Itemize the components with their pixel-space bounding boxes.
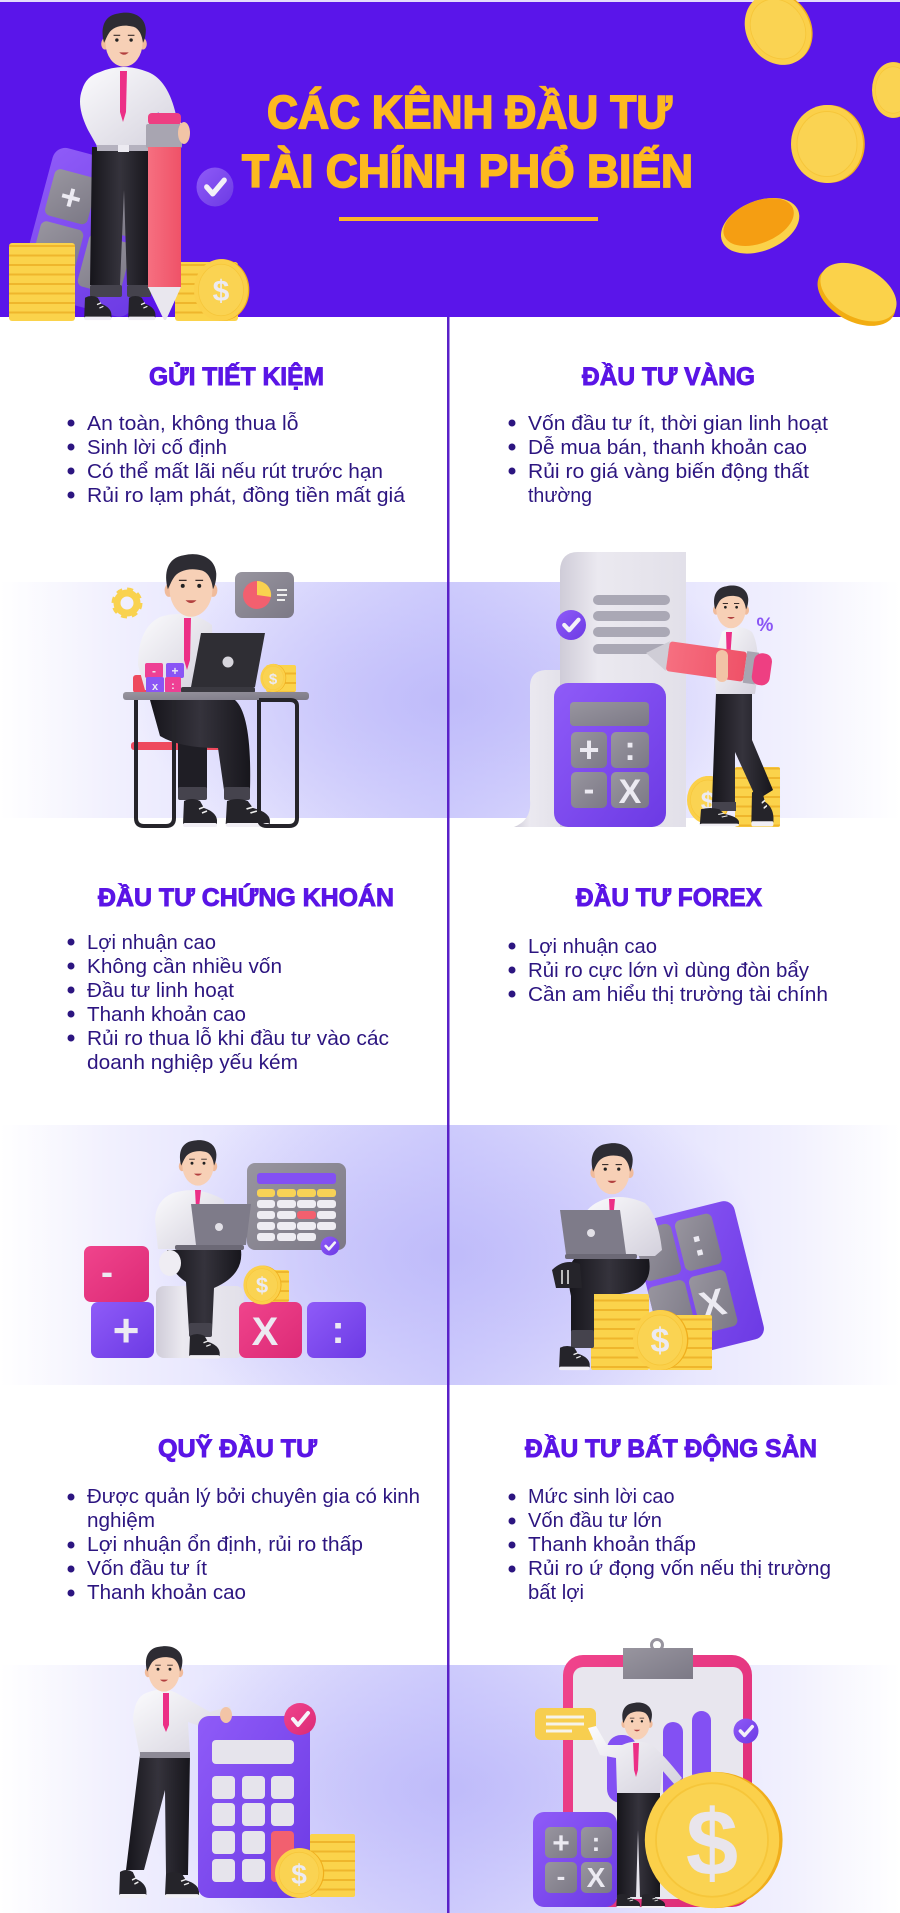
illustration: man with laptop on coins	[552, 1143, 766, 1370]
illustration: clipboard, chart, man and big coin: :	[592, 1827, 600, 1857]
bullet list: Rủi ro ứ đọng vốn nếu thị trường	[528, 1558, 831, 1580]
header banner	[0, 0, 900, 338]
illustration: man on math blocks with calendar: +	[113, 1304, 139, 1356]
heading: ĐẦU TƯ FOREX	[576, 883, 762, 912]
icon: left coin stack	[9, 243, 75, 321]
bullet list: Lợi nhuận cao	[87, 932, 216, 954]
illustration: man with laptop on coins: $	[651, 1322, 670, 1360]
bullet list: Thanh khoản thấp	[528, 1534, 696, 1556]
background band	[448, 1665, 900, 1913]
heading: QUỸ ĐẦU TƯ	[158, 1433, 317, 1463]
illustration: clipboard, chart, man and big coin	[533, 1640, 783, 1908]
heading: GỬI TIẾT KIỆM	[149, 361, 324, 391]
illustration: man at desk: x	[152, 681, 159, 693]
background band	[0, 1125, 448, 1385]
illustration: man at desk: +	[171, 664, 179, 678]
bullet list: Được quản lý bởi chuyên gia có kinh	[87, 1486, 420, 1508]
icon: floating gold coins	[713, 0, 900, 338]
title: TÀI CHÍNH PHỔ BIẾN	[242, 145, 693, 197]
bullet list: Sinh lời cố định	[87, 437, 227, 459]
bullet list: Cần am hiểu thị trường tài chính	[528, 984, 828, 1006]
illustration: receipt, calculator and man with pencil	[514, 552, 780, 827]
panel: đầu tư vàng	[448, 362, 900, 827]
panel: gửi tiết kiệm	[0, 361, 448, 827]
illustration: receipt, calculator and man with pencil: $	[701, 786, 716, 816]
bullet list	[508, 1486, 831, 1604]
bullet list: Vốn đầu tư lớn	[528, 1510, 662, 1532]
illustration: clipboard, chart, man and big coin: $	[686, 1790, 738, 1895]
background band	[448, 1125, 900, 1385]
bullet list: Thanh khoản cao	[87, 1582, 246, 1604]
illustration: man on math blocks with calendar	[84, 1140, 366, 1359]
illustration: man at desk	[113, 554, 309, 827]
character: man with pencil	[80, 13, 187, 320]
title	[242, 86, 693, 197]
illustration: man on math blocks with calendar: :	[331, 1308, 345, 1352]
icon: right coin stack and dollar coin	[175, 259, 249, 321]
illustration: receipt, calculator and man with pencil: +	[578, 729, 600, 770]
background band	[0, 582, 448, 818]
bullet list: Vốn đầu tư ít, thời gian linh hoạt	[528, 413, 828, 435]
illustration: man on math blocks with calendar: X	[252, 1310, 279, 1354]
bullet list: Lợi nhuận ổn định, rủi ro thấp	[87, 1534, 363, 1556]
bullet list: thường	[528, 485, 592, 507]
illustration: clipboard, chart, man and big coin: +	[552, 1827, 570, 1860]
panel: đầu tư chứng khoán	[0, 882, 448, 1385]
background band	[448, 582, 900, 818]
icon: percent sign: %	[757, 615, 774, 636]
bullet list: nghiệm	[87, 1510, 155, 1532]
bullet list: Rủi ro cực lớn vì dùng đòn bẩy	[528, 960, 809, 982]
bullet list: Rủi ro thua lỗ khi đầu tư vào các	[87, 1027, 389, 1050]
icon: tilted calculator: +	[56, 175, 86, 220]
bullet list: Không cần nhiều vốn	[87, 956, 282, 978]
bullet list	[68, 1486, 420, 1604]
icon: giant pencil	[146, 113, 190, 320]
illustration: clipboard, chart, man and big coin: X	[587, 1862, 606, 1893]
illustration: man on math blocks with calendar: -	[101, 1251, 113, 1292]
illustration: man at desk: $	[269, 671, 278, 688]
bullet list: Rủi ro giá vàng biến động thất	[528, 461, 809, 483]
title underline	[339, 217, 598, 221]
bullet list: Rủi ro lạm phát, đồng tiền mất giá	[87, 485, 406, 507]
icon: right coin stack and dollar coin: $	[213, 275, 230, 308]
illustration: man with laptop on coins: :	[686, 1222, 709, 1265]
bullet list	[68, 412, 406, 507]
bullet list: doanh nghiệp yếu kém	[87, 1052, 298, 1074]
bullet list: Lợi nhuận cao	[528, 936, 657, 958]
title: CÁC KÊNH ĐẦU TƯ	[267, 86, 673, 138]
heading: ĐẦU TƯ CHỨNG KHOÁN	[98, 882, 394, 912]
centre divider	[447, 317, 450, 1913]
illustration: receipt, calculator and man with pencil: :	[624, 730, 636, 768]
illustration: man on math blocks with calendar: $	[256, 1273, 268, 1298]
bullet list: An toàn, không thua lỗ	[87, 412, 298, 435]
illustration: man at desk: :	[171, 680, 175, 692]
panel: quỹ đầu tư	[0, 1433, 448, 1913]
illustration: receipt, calculator and man with pencil: X	[619, 773, 642, 811]
illustration: man with big calculator: $	[291, 1859, 307, 1890]
panel: đầu tư bất động sản	[448, 1433, 900, 1913]
illustration: clipboard, chart, man and big coin: -	[557, 1861, 565, 1891]
illustration: receipt, calculator and man with pencil: -	[584, 771, 594, 807]
heading: ĐẦU TƯ VÀNG	[582, 362, 755, 391]
illustration: man with laptop on coins: X	[696, 1281, 731, 1328]
bullet list: Vốn đầu tư ít	[87, 1558, 207, 1580]
illustration: man at desk: -	[152, 664, 156, 678]
panel: đầu tư forex	[448, 883, 900, 1385]
illustration: man with big calculator	[119, 1646, 355, 1898]
bullet list: bất lợi	[528, 1582, 584, 1604]
heading: ĐẦU TƯ BẤT ĐỘNG SẢN	[525, 1433, 817, 1463]
bullet list: Thanh khoản cao	[87, 1004, 246, 1026]
icon: check badge	[196, 168, 234, 206]
bullet list	[508, 936, 828, 1006]
bullet list	[508, 413, 828, 507]
bullet list: Có thể mất lãi nếu rút trước hạn	[87, 461, 383, 483]
bullet list: Mức sinh lời cao	[528, 1486, 674, 1508]
background band	[0, 1665, 448, 1913]
icon: tilted calculator	[17, 145, 167, 320]
bullet list: Đầu tư linh hoạt	[87, 980, 234, 1002]
bullet list	[68, 932, 389, 1074]
bullet list: Dễ mua bán, thanh khoản cao	[528, 436, 807, 459]
